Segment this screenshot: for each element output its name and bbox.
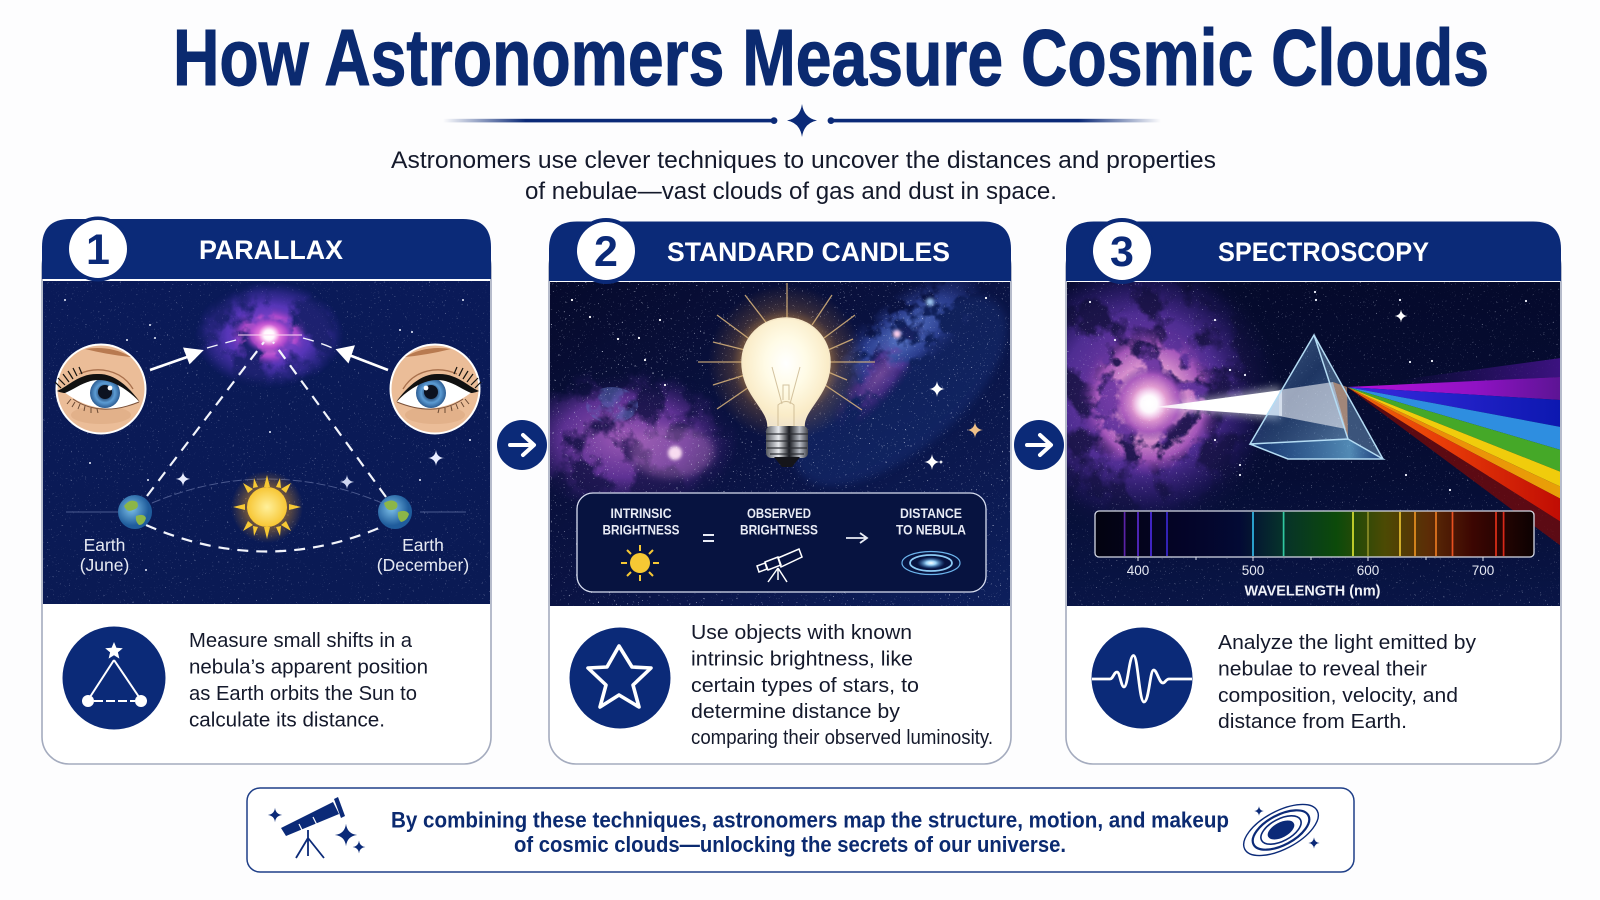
observed brightness <box>740 505 818 582</box>
standard candles text: intrinsic brightness, like <box>691 648 913 670</box>
standard candles text <box>691 621 993 749</box>
spectroscopy text: composition, velocity, and <box>1218 684 1458 707</box>
wavelength axis: 700 <box>1472 563 1494 578</box>
parallax text: as Earth orbits the Sun to <box>189 682 417 705</box>
icon: star <box>570 628 670 728</box>
parallax text <box>189 629 428 732</box>
icon: galaxy <box>1236 794 1326 866</box>
icon: telescope <box>268 797 365 858</box>
prism <box>1250 335 1383 459</box>
standard candles text: Use objects with known <box>691 621 912 644</box>
step number 2 <box>573 218 639 284</box>
earth labels <box>80 535 469 575</box>
parallax text: calculate its distance. <box>189 708 385 732</box>
step number 3 <box>1089 218 1155 284</box>
wavelength axis: WAVELENGTH (nm) <box>1244 582 1380 600</box>
earth markers <box>118 495 412 529</box>
observed brightness: BRIGHTNESS <box>740 522 818 538</box>
panel: parallax <box>42 216 491 764</box>
earth labels: (December) <box>377 555 469 575</box>
step number 3: 3 <box>1110 228 1134 276</box>
heading: standard candles: STANDARD CANDLES <box>667 237 950 267</box>
parallax text: Measure small shifts in a <box>189 629 413 652</box>
conclusion text: of cosmic clouds—unlocking the secrets of our universe. <box>514 832 1066 857</box>
heading: spectroscopy: SPECTROSCOPY <box>1218 237 1429 267</box>
card 2 header bar <box>549 222 1011 281</box>
sight arrows <box>150 347 388 370</box>
subtitle: of nebulae—vast clouds of gas and dust in space. <box>525 178 1057 205</box>
arrow: parallax to standard candles <box>497 420 547 470</box>
wavelength axis: 600 <box>1357 563 1379 578</box>
panel: spectroscopy <box>1065 218 1562 765</box>
wavelength axis <box>1127 557 1494 600</box>
icon: light bulb <box>698 283 875 467</box>
spectrum strip <box>1095 511 1534 557</box>
flow arrow <box>846 533 867 543</box>
candle scene <box>550 282 1010 606</box>
parallax text: nebula’s apparent position <box>189 656 428 678</box>
earth labels: (June) <box>80 555 129 575</box>
distance to nebula <box>896 505 966 574</box>
rainbow beams <box>1347 358 1561 546</box>
spectroscopy text <box>1218 631 1477 733</box>
distance to nebula: TO NEBULA <box>896 522 966 538</box>
eye: December view <box>390 344 481 434</box>
conclusion text: By combining these techniques, astronomers map the structure, motion, and makeup <box>391 808 1229 832</box>
earth labels: Earth <box>84 535 125 555</box>
icon: triangle <box>62 626 166 730</box>
heading: parallax: PARALLAX <box>199 235 343 265</box>
distance to nebula: DISTANCE <box>900 505 962 521</box>
icon: wave <box>1092 628 1192 728</box>
conclusion text <box>391 808 1229 857</box>
eye: June view <box>55 344 146 434</box>
standard candles text: certain types of stars, to <box>691 674 919 697</box>
parallax diagram <box>43 281 490 604</box>
wavelength axis: 500 <box>1242 563 1264 578</box>
arrow: standard candles to spectroscopy <box>1014 420 1064 470</box>
standard candles text: determine distance by <box>691 700 901 723</box>
title divider with star <box>443 104 1161 137</box>
equals sign <box>703 535 714 541</box>
subtitle: Astronomers use clever techniques to uncover the distances and properties <box>391 147 1216 174</box>
card 3 header bar <box>1066 222 1561 281</box>
intrinsic brightness: BRIGHTNESS <box>602 522 680 538</box>
panel: conclusion banner <box>247 788 1354 872</box>
prism scene <box>1067 282 1560 606</box>
step number 2: 2 <box>594 228 618 276</box>
spectroscopy text: nebulae to reveal their <box>1218 658 1427 680</box>
intrinsic brightness: INTRINSIC <box>610 505 672 521</box>
sun <box>231 471 303 543</box>
white light beam <box>1156 386 1280 420</box>
card 3 body <box>1066 240 1561 764</box>
observed brightness: OBSERVED <box>747 505 811 521</box>
dashed sight lines <box>146 338 386 552</box>
step number 1: 1 <box>86 226 110 274</box>
panel: standard candles <box>548 218 1012 765</box>
intrinsic brightness <box>602 505 680 581</box>
formula box <box>577 493 986 592</box>
step number 1 <box>66 216 130 282</box>
subtitle <box>391 147 1216 205</box>
card 2 body <box>549 240 1011 764</box>
standard candles text: comparing their observed luminosity. <box>691 726 993 749</box>
spectroscopy text: distance from Earth. <box>1218 710 1407 733</box>
wavelength axis: 400 <box>1127 563 1149 578</box>
card 1 body <box>42 240 491 764</box>
card 1 header bar <box>42 219 491 279</box>
spectroscopy text: Analyze the light emitted by <box>1218 631 1477 654</box>
earth labels: Earth <box>402 535 444 555</box>
